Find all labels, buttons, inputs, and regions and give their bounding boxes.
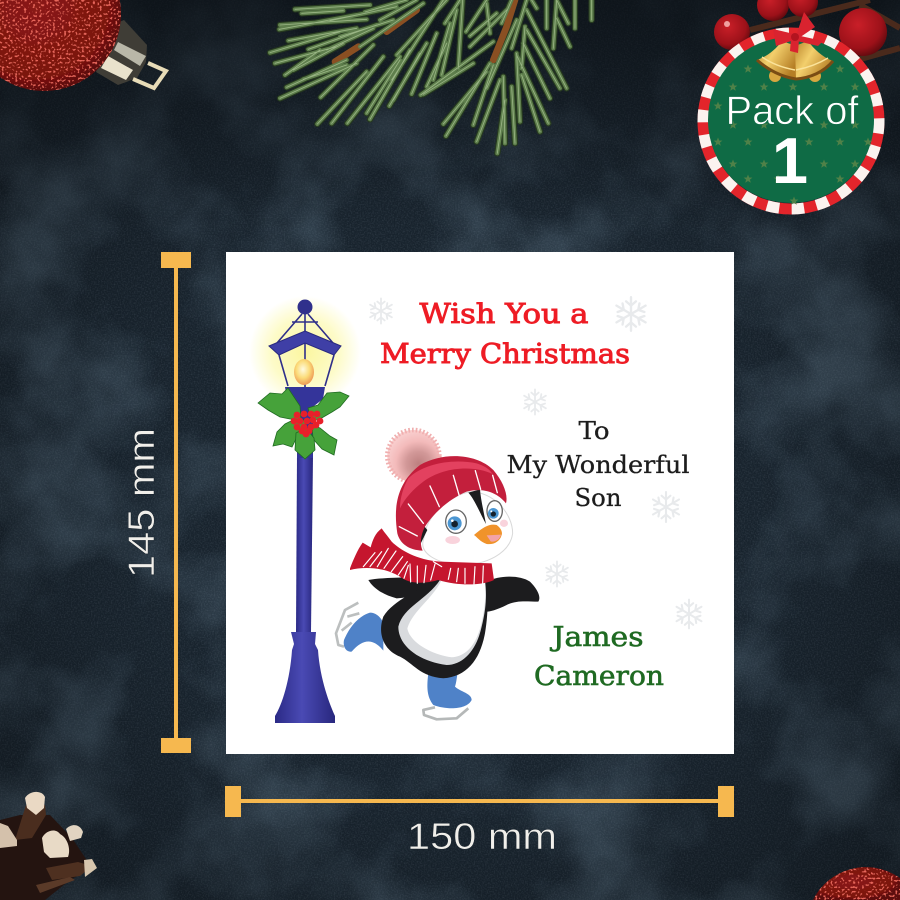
lamp post [296, 455, 313, 632]
holly leaves [258, 388, 349, 459]
badge label: Pack of [726, 89, 859, 133]
ornament: red glitter bauble bottom right [813, 867, 900, 900]
text: greeting headline: Merry Christmas [380, 339, 630, 370]
body [381, 577, 488, 678]
beak [474, 525, 502, 544]
lamp head [269, 300, 341, 458]
panel: greeting card [226, 252, 734, 754]
text: greeting headline [380, 299, 630, 370]
head [423, 492, 513, 565]
cheeks [445, 536, 460, 544]
back skate [336, 603, 359, 647]
badge candy-stripe ring [703, 33, 879, 209]
dimension: width 150 mm: 150 mm [407, 816, 557, 857]
badge number: 1 [772, 124, 808, 197]
icon: red bow [773, 12, 823, 53]
branch with red berries behind badge [714, 0, 900, 62]
ornament: red glitter bauble top left [0, 0, 166, 91]
text: recipient: My Wonderful [506, 451, 690, 479]
badge: Pack of 1 [703, 12, 879, 209]
text: recipient [506, 417, 690, 512]
dimension: height 145 mm [121, 252, 191, 753]
icon: skating penguin [336, 430, 539, 719]
text: recipient: To [578, 417, 610, 445]
hat [396, 456, 507, 551]
text: recipient: Son [574, 484, 622, 512]
text: name: James [549, 622, 644, 653]
icon: street lamp with holly [249, 296, 361, 723]
front skate [423, 707, 468, 719]
badge green disc with stars [708, 37, 874, 205]
icon: golden bells [757, 41, 833, 82]
right flipper [486, 577, 539, 612]
ornament: pine cone bottom left [0, 792, 97, 900]
text: name [534, 622, 664, 692]
dimension: width 150 mm [225, 786, 734, 857]
dimension: height 145 mm: 145 mm [121, 428, 162, 578]
belly [398, 580, 486, 665]
eyes [446, 501, 502, 533]
holly berries [291, 411, 323, 437]
front foot [427, 670, 472, 708]
left flipper [368, 575, 442, 598]
pompom [387, 430, 439, 482]
pine branch top centre [270, 0, 592, 153]
back leg [344, 613, 383, 652]
scarf [350, 528, 494, 584]
snowflakes [368, 297, 704, 628]
text: greeting headline: Wish You a [420, 299, 588, 330]
text: name: Cameron [534, 661, 664, 692]
